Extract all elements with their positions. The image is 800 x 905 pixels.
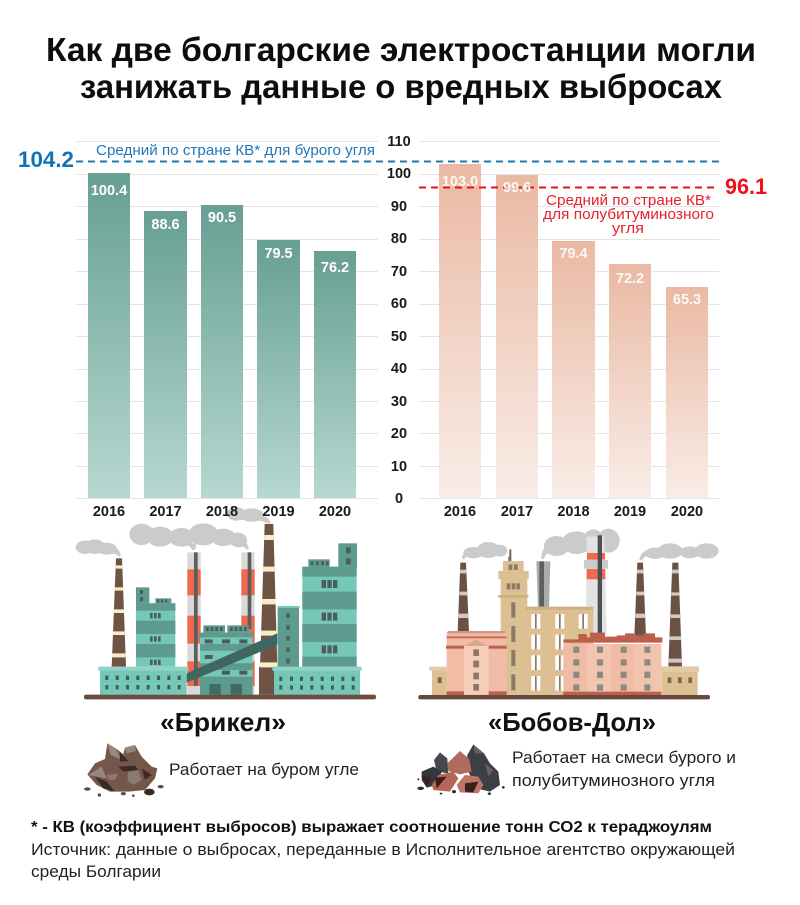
bar 2018	[201, 205, 243, 520]
reference line: brown coal average: Средний по стране КВ* для бурого угля	[96, 142, 375, 159]
y axis: 90	[391, 199, 407, 215]
reference line: sub-bituminous coal average: угля	[612, 220, 644, 237]
tower	[278, 606, 300, 667]
value labels: Брикел: 79.5	[264, 246, 293, 262]
bar 2020: 2020	[319, 504, 351, 520]
value labels: Брикел: 90.5	[208, 210, 236, 226]
grey chimney	[536, 561, 550, 607]
smoke	[76, 507, 271, 557]
bar 2016: 2016	[93, 504, 125, 520]
source: среды Болгарии	[31, 862, 161, 881]
title: Как две болгарские электростанции могли	[46, 31, 756, 68]
ground	[418, 695, 710, 699]
bar 2018	[552, 241, 595, 520]
value labels: Бобов-Дол: 103.0	[442, 174, 478, 190]
central building	[199, 625, 253, 695]
striped tower	[584, 535, 608, 635]
bar 2019: 2019	[262, 504, 295, 520]
bar chart: Брикел	[76, 142, 378, 520]
bar 2020: 2020	[671, 504, 703, 520]
low building right	[272, 667, 362, 695]
beige building	[526, 607, 593, 695]
bar 2017: 2017	[501, 504, 533, 520]
footnote: * - КВ (коэффициент выбросов) выражает соотношение тонн СО2 к тераджоулям	[31, 819, 712, 836]
title	[46, 31, 756, 105]
y axis: 50	[391, 329, 407, 345]
caption: Бобов-Дол fuel	[512, 748, 736, 790]
y axis: 40	[391, 361, 407, 377]
value labels: Бобов-Дол: 72.2	[616, 271, 644, 287]
y axis	[387, 134, 411, 507]
illustration: Бобов-Дол power plant	[418, 529, 719, 699]
side buildings	[429, 666, 699, 695]
value labels: Брикел	[91, 183, 349, 276]
low building left	[98, 667, 188, 695]
bar 2016	[88, 173, 130, 520]
y axis: 70	[391, 264, 407, 280]
pink building left	[446, 631, 507, 695]
caption: Бобов-Дол fuel: полубитуминозного угля	[512, 771, 715, 790]
reference line: sub-bituminous coal average	[419, 174, 767, 237]
plant name: Бобов-Дол: «Бобов-Дол»	[488, 707, 656, 737]
ground	[84, 695, 376, 699]
chimney 1	[112, 558, 126, 667]
bar 2020	[666, 287, 708, 520]
striped chimneys	[187, 552, 255, 695]
value labels: Брикел: 100.4	[91, 183, 127, 199]
bar 2020	[314, 251, 356, 520]
caption: Брикел fuel: Работает на буром угле	[169, 760, 359, 779]
reference line: brown coal average: 104.2	[18, 147, 74, 172]
bar 2019: 2019	[614, 504, 646, 520]
value labels: Брикел: 76.2	[321, 260, 349, 276]
y axis: 60	[391, 296, 407, 312]
conveyor	[187, 633, 277, 683]
source	[31, 840, 735, 881]
y axis: 10	[391, 459, 407, 475]
value labels: Бобов-Дол: 65.3	[673, 292, 701, 308]
chimneys	[458, 563, 682, 667]
bar 2017	[144, 211, 187, 520]
y axis: 30	[391, 394, 407, 410]
bar 2019	[609, 264, 651, 520]
y axis: 80	[391, 231, 407, 247]
bar 2019	[257, 240, 300, 520]
smoke	[462, 529, 719, 561]
value labels: Бобов-Дол: 99.6	[503, 180, 531, 196]
plant name: Брикел: «Брикел»	[160, 707, 286, 737]
bar 2016	[439, 164, 481, 520]
illustration: Брикел power plant	[76, 507, 376, 699]
value labels: Брикел: 88.6	[151, 217, 180, 233]
reference line: brown coal average	[18, 142, 719, 172]
reference line: sub-bituminous coal average: для полубитуминозного	[543, 206, 714, 223]
bar 2018: 2018	[557, 504, 590, 520]
source: Источник: данные о выбросах, переданные в Исполнительное агентство окружающей	[31, 840, 735, 859]
y axis: 0	[395, 491, 403, 507]
bar chart: Бобов-Дол	[419, 142, 719, 520]
tall chimney	[259, 524, 277, 695]
pink building right	[563, 633, 662, 695]
icon: brown coal pile	[84, 743, 164, 797]
value labels: Бобов-Дол	[442, 174, 701, 308]
y axis: 100	[387, 166, 411, 182]
building right	[302, 543, 357, 667]
bar 2016: 2016	[444, 504, 476, 520]
y axis: 110	[387, 134, 411, 150]
beige tower	[498, 549, 529, 695]
icon: mixed coal pile	[417, 744, 505, 795]
bar 2017	[496, 175, 538, 520]
title: занижать данные о вредных выбросах	[80, 68, 723, 105]
reference line: sub-bituminous coal average: 96.1	[725, 174, 767, 199]
bar 2018: 2018	[206, 504, 238, 520]
caption: Бобов-Дол fuel: Работает на смеси бурого и	[512, 748, 736, 767]
reference line: sub-bituminous coal average: Средний по стране КВ*	[546, 192, 711, 209]
value labels: Бобов-Дол: 79.4	[559, 246, 588, 262]
bar 2017: 2017	[149, 504, 182, 520]
y axis: 20	[391, 426, 407, 442]
building left	[136, 587, 175, 667]
